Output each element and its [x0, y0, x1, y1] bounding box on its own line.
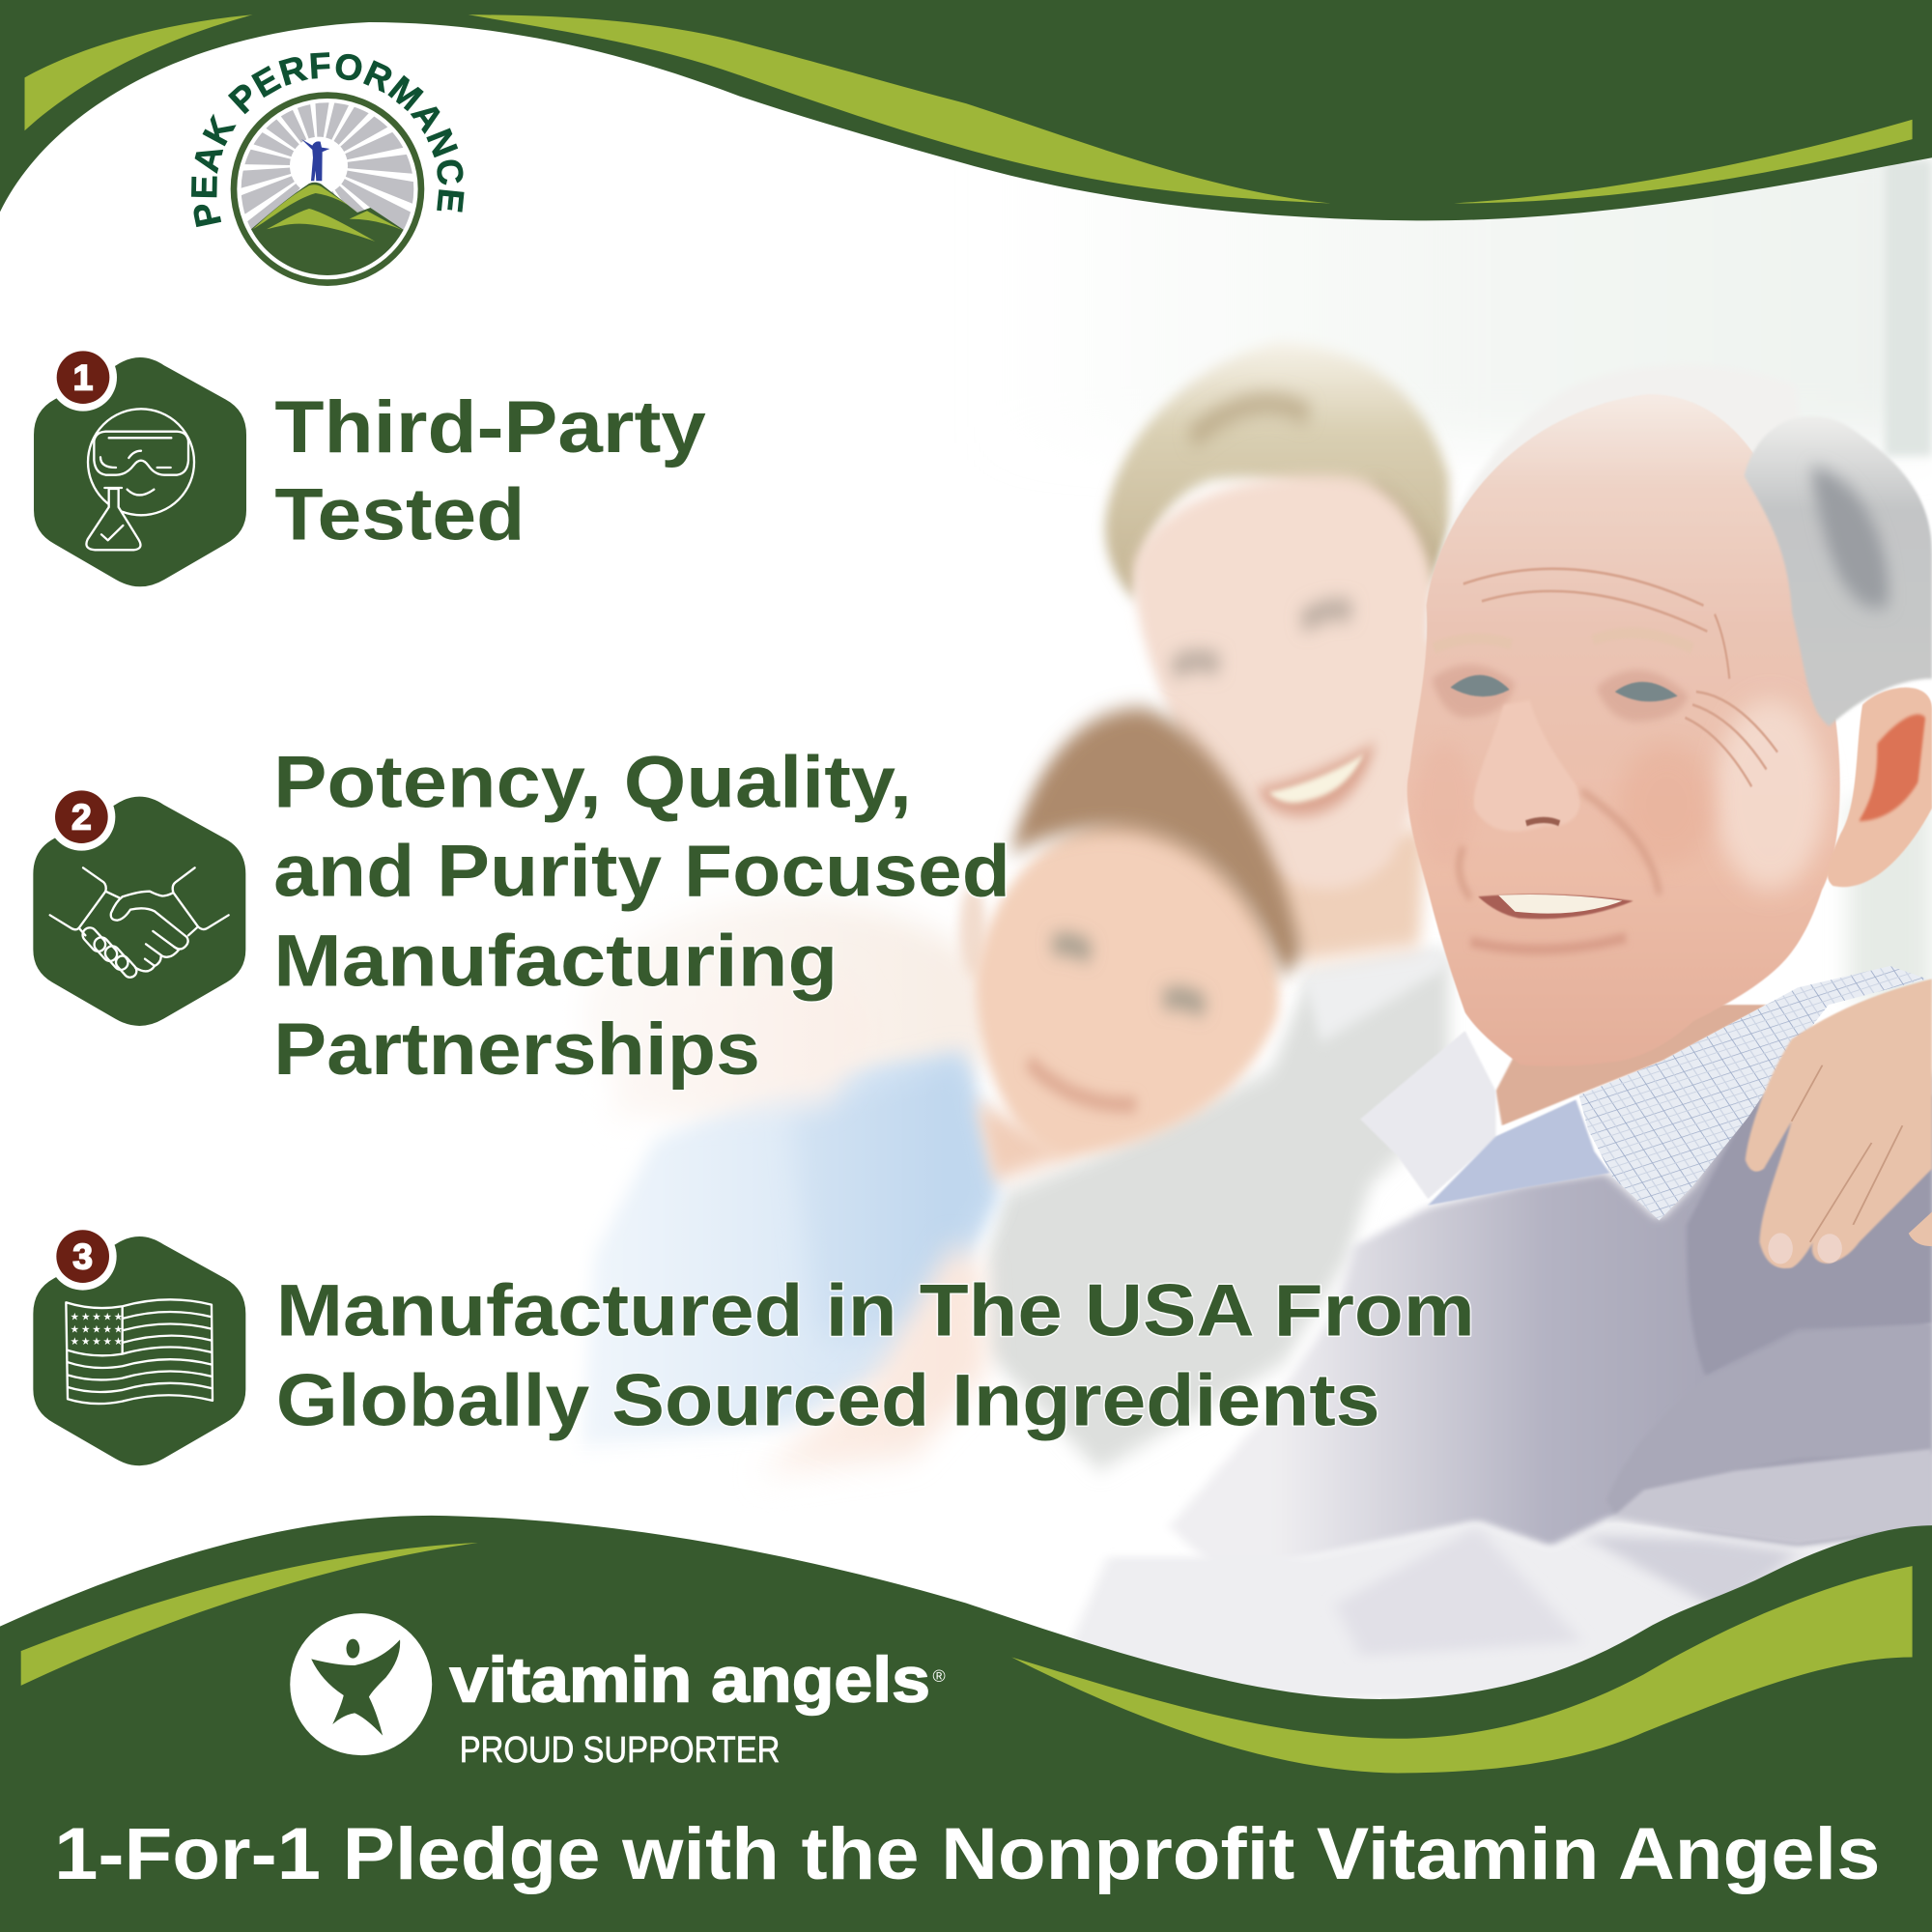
boy shirt	[582, 1054, 998, 1447]
woman eyes	[1173, 610, 1351, 669]
heading 3: Manufactured in The USA From	[276, 1270, 1475, 1352]
number badge 3: 3	[72, 1236, 93, 1276]
logo ring	[234, 96, 421, 283]
number badge 1: 1	[73, 356, 93, 397]
collar right	[1579, 966, 1927, 1220]
lower lip shade	[1470, 938, 1626, 950]
body: sweater, sleeves, collar, hand	[1070, 966, 1932, 1699]
man	[1070, 365, 1932, 1699]
heading 3	[276, 1270, 1475, 1442]
heading 2	[273, 741, 1010, 1091]
pledge heading: 1-For-1 Pledge with the Nonprofit Vitamin Angels	[54, 1813, 1880, 1895]
lime swoosh right	[1454, 120, 1913, 203]
ear	[1828, 688, 1932, 887]
boy eyes	[1053, 944, 1204, 1009]
collar left	[1360, 1031, 1495, 1199]
head	[1407, 365, 1932, 1066]
skull fringe	[1426, 365, 1814, 683]
boy arm	[754, 1247, 988, 1478]
icon: american flag: ★★★★★	[71, 1313, 125, 1323]
boy ear	[959, 885, 986, 978]
heading 1: Tested	[274, 474, 525, 556]
heading 3: Globally Sourced Ingredients	[276, 1360, 1380, 1442]
climber figure	[301, 139, 329, 181]
woman and boy	[582, 342, 1449, 1478]
smile line	[1459, 791, 1660, 898]
wordmark: vitamin angels	[450, 1644, 930, 1716]
woman neck	[1216, 800, 1426, 962]
boy mouth	[1028, 1062, 1136, 1105]
woman face	[1133, 475, 1437, 889]
eye sockets	[1432, 665, 1515, 718]
bottom-left fade	[0, 1485, 985, 1725]
number badge 1	[49, 344, 117, 412]
cheek highlight	[1715, 700, 1826, 890]
vitamin angels logo	[290, 1613, 946, 1771]
cheek red	[1619, 744, 1715, 865]
sofa beige	[582, 900, 1001, 1131]
window background	[985, 124, 1932, 998]
number badge 3	[49, 1223, 117, 1291]
hexagon badge 3	[33, 1223, 245, 1465]
lime swoosh right	[1011, 1566, 1913, 1773]
face	[1407, 394, 1840, 1066]
hair streaks	[1191, 404, 1432, 569]
heading 1	[274, 386, 706, 556]
dark green band	[0, 1516, 1932, 1932]
heading 2: Partnerships	[273, 1009, 760, 1091]
lime swoosh left	[25, 14, 252, 130]
number badge 2	[47, 783, 115, 851]
sweater body	[1169, 1074, 1932, 1578]
sleeve folds	[1687, 1095, 1932, 1376]
woman mouth	[1256, 743, 1377, 816]
icon: goggles and flask	[86, 409, 194, 550]
hand	[1746, 979, 1932, 1268]
icon: american flag	[66, 1299, 213, 1404]
lime swoosh centre	[469, 14, 1331, 203]
sun rays	[258, 104, 380, 227]
emblem circle	[290, 1613, 432, 1755]
brows and wrinkles	[1434, 633, 1692, 648]
woman hair	[1105, 342, 1449, 600]
white cuff folds	[1070, 1518, 1932, 1699]
hair	[1745, 416, 1932, 726]
eyes	[1450, 675, 1510, 696]
lime swoosh left	[21, 1543, 478, 1686]
neck	[1495, 1005, 1767, 1125]
woman sweater	[988, 954, 1449, 1470]
heading 2: Manufacturing	[273, 920, 838, 1002]
hexagon badge 2	[33, 783, 245, 1026]
item 2: manufacturing partnerships	[33, 741, 1010, 1091]
nose	[1474, 700, 1580, 832]
shirt front	[1428, 1099, 1609, 1206]
boy face	[976, 815, 1279, 1158]
arched brand name: PEAK PERFORMANCE	[191, 52, 464, 228]
number badge 2: 2	[71, 796, 92, 837]
heading 2: Potency, Quality,	[273, 741, 912, 823]
mountain	[251, 182, 404, 275]
bottom wave band	[0, 1516, 1932, 1932]
item 1: third-party tested	[34, 344, 706, 586]
top wave band	[0, 0, 1932, 220]
proud supporter: PROUD SUPPORTER	[460, 1729, 780, 1771]
hexagon badge 1	[34, 344, 246, 586]
registered mark: ®	[933, 1666, 946, 1686]
heading 1: Third-Party	[274, 386, 706, 469]
boy hair	[1009, 708, 1302, 978]
icon: handshake	[50, 867, 229, 980]
boy neck	[976, 1100, 1074, 1181]
mouth	[1478, 895, 1634, 919]
emblem figure	[311, 1639, 400, 1736]
logo: Peak Performance	[191, 52, 464, 286]
item 3: made in the USA	[33, 1223, 1475, 1465]
icon: american flag: ★★★★★	[71, 1337, 125, 1348]
icon: american flag: ★★★★★	[71, 1324, 125, 1335]
heading 2: and Purity Focused	[273, 830, 1010, 912]
dark green band	[0, 0, 1932, 220]
